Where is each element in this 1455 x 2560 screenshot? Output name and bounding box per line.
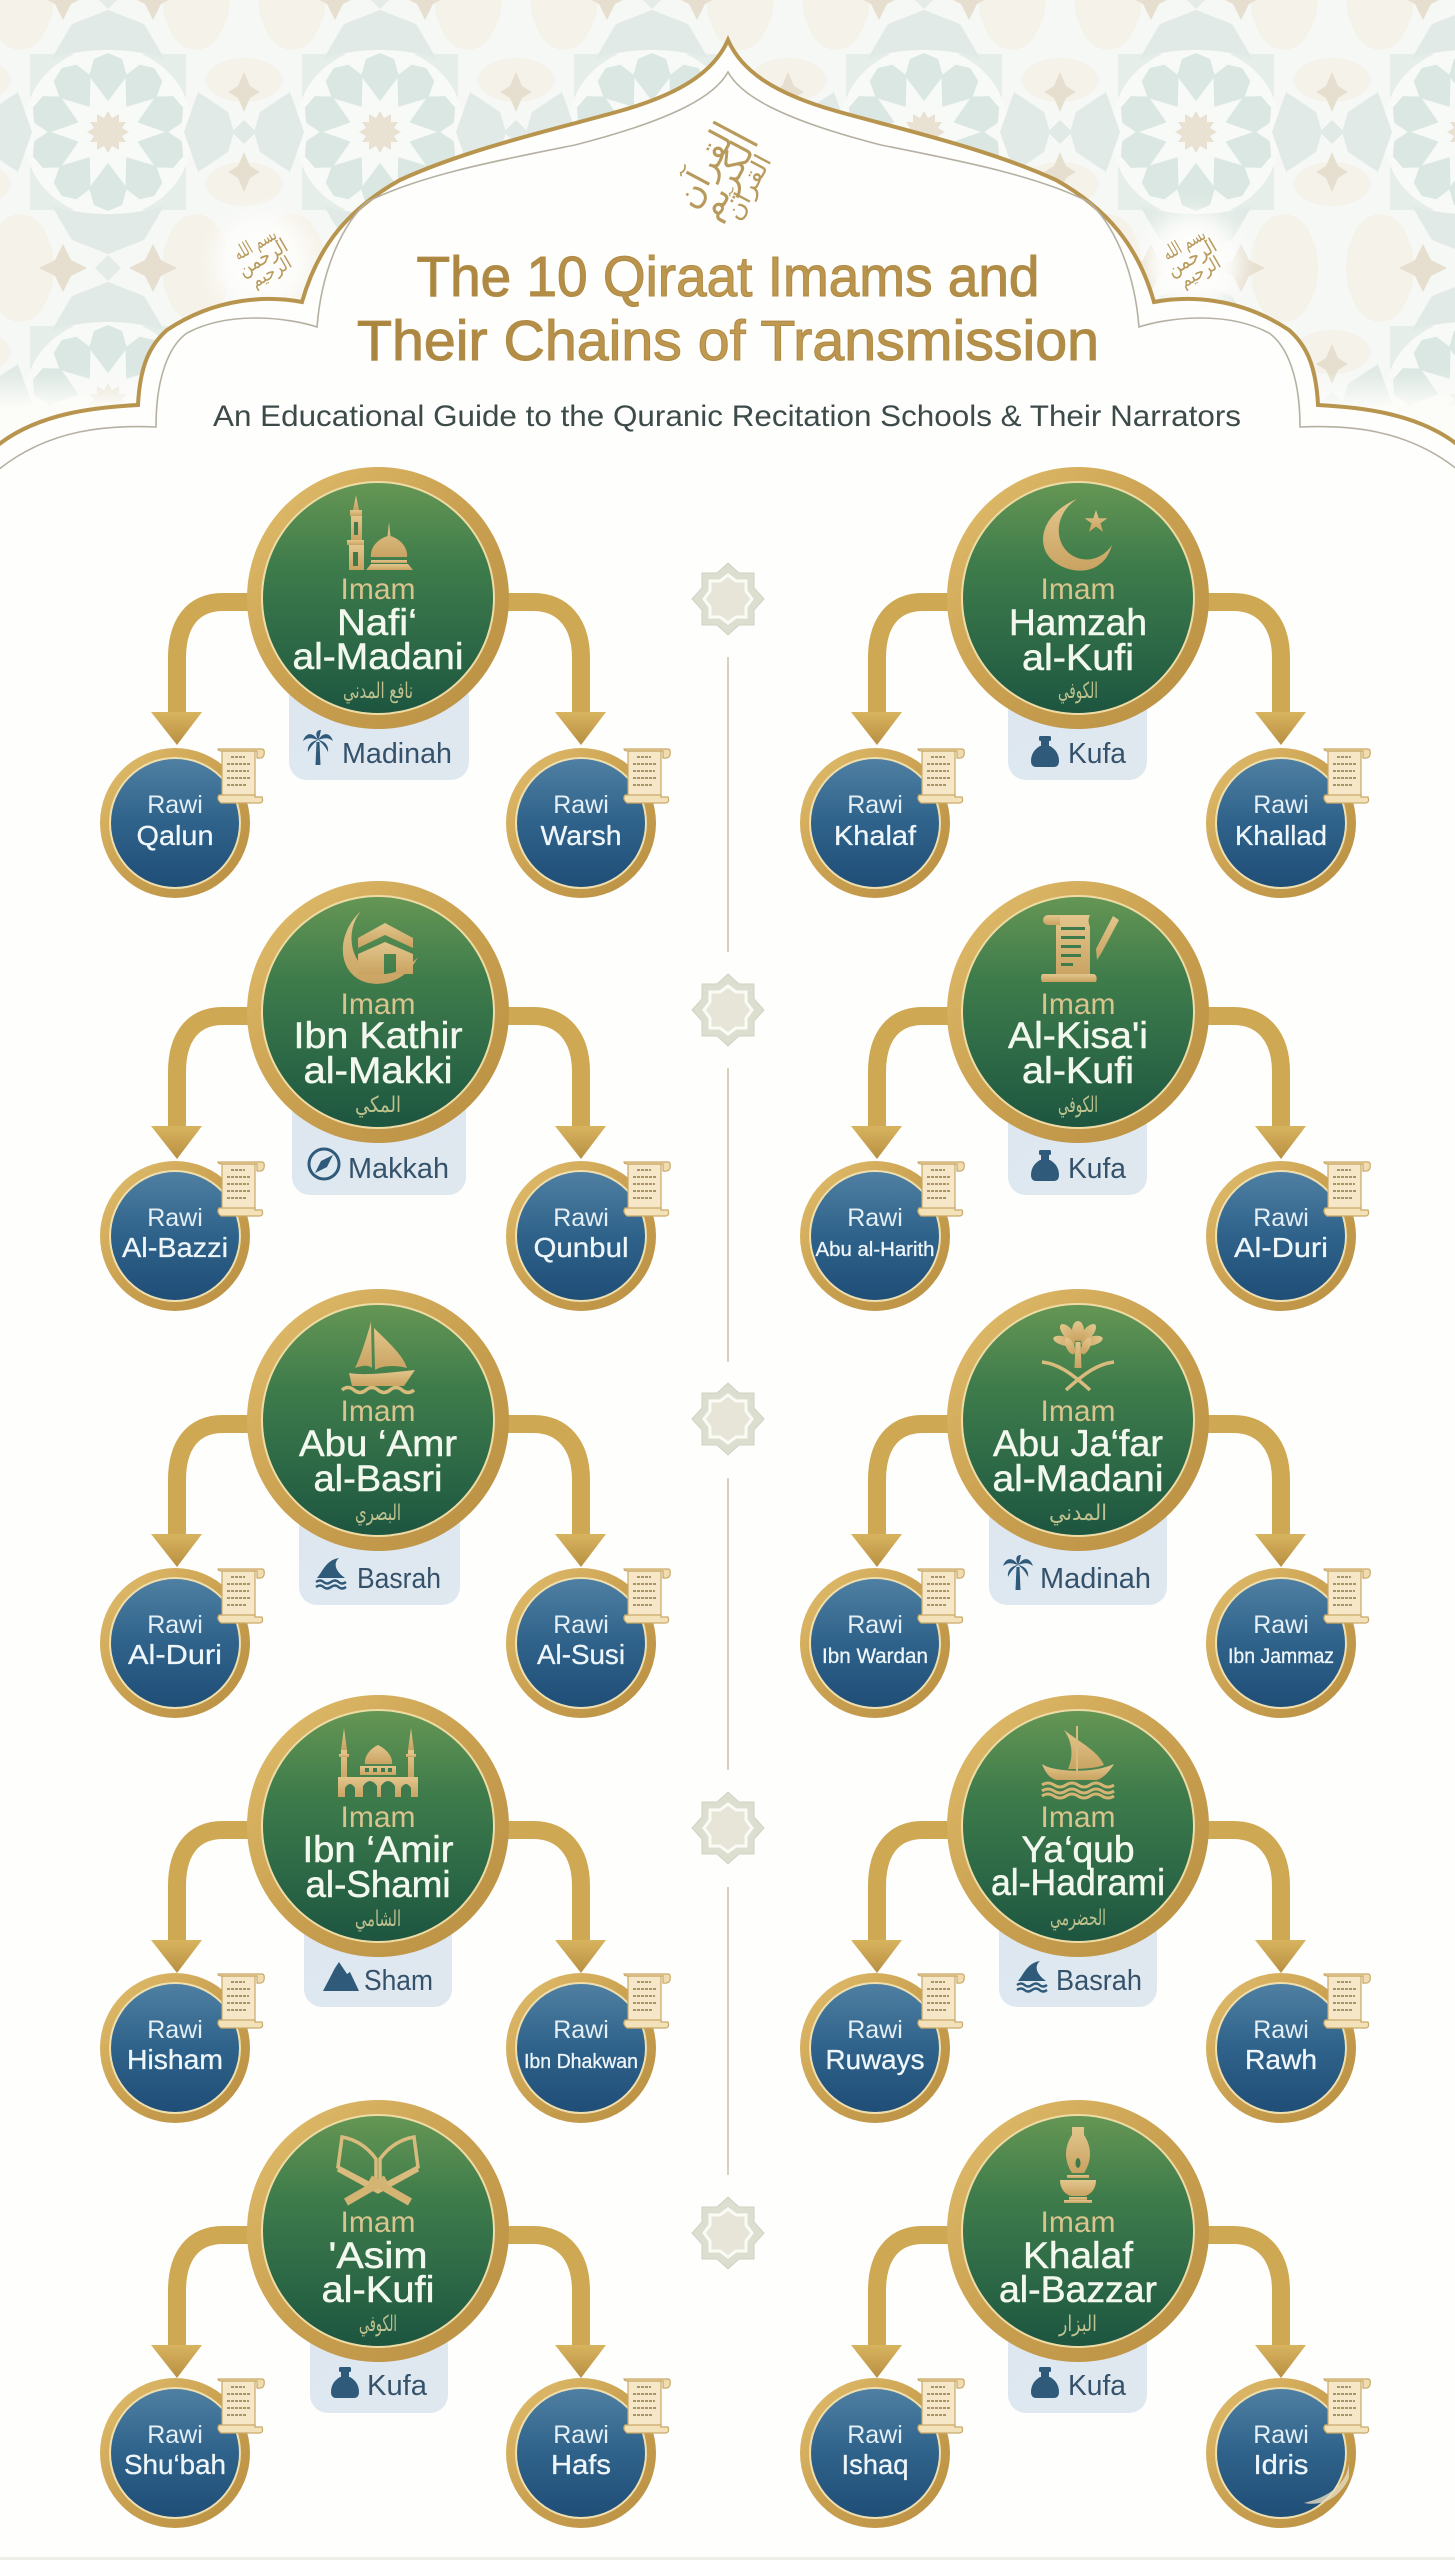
panel: Imam Hamzah al-Kufi (800, 467, 1370, 898)
narrator: Al-Duri (100, 1568, 264, 1718)
calligraphy roundel right: بسم الله (1159, 223, 1209, 265)
location badge: Madinah (989, 1500, 1167, 1605)
narrator: Al-Bazzi: Al-Bazzi (122, 1232, 228, 1263)
arrows to narrators (851, 1830, 1306, 1973)
narrator: Al-Susi: Al-Susi (537, 1639, 625, 1670)
narrator: Al-Bazzi (100, 1161, 264, 1311)
calligraphy roundel left (226, 221, 300, 295)
calligraphy roundel right: الرحيم (1176, 252, 1225, 292)
imam medallion (947, 1289, 1209, 1551)
narrator: Al-Duri: Rawi (147, 1611, 203, 1639)
narrator: Warsh (506, 748, 670, 898)
imam medallion (247, 467, 509, 729)
imam medallion: نافع المدني (343, 679, 413, 704)
narrator: Hafs: Hafs (551, 2449, 611, 2480)
calligraphy roundel left: الرحيم (247, 252, 296, 292)
imam medallion: Ya‘qub (1022, 1829, 1134, 1870)
narrator: Rawh: Rawh (1245, 2044, 1317, 2075)
imam medallion: Imam (1040, 1801, 1116, 1834)
location badge: Makkah (292, 1092, 466, 1195)
narrator: Ishaq: Ishaq (842, 2449, 908, 2480)
divider star 2 (692, 974, 764, 1046)
arrows to narrators (851, 2235, 1306, 2378)
narrator: Abu al-Harith: Rawi (847, 1204, 903, 1232)
divider star 3 (692, 1383, 764, 1455)
narrator: Ibn Wardan: Rawi (847, 1611, 903, 1639)
imam medallion (947, 2100, 1209, 2362)
icon: Kaaba and crescent (343, 911, 418, 984)
location badge: Kufa (1008, 678, 1147, 780)
narrator: Khalaf: Rawi (847, 791, 903, 819)
imam medallion: Ibn Kathir (294, 1015, 462, 1056)
imam medallion: Imam (340, 1801, 416, 1834)
narrator: Ibn Dhakwan: Ibn Dhakwan (524, 2051, 638, 2073)
imam medallion: Nafi‘ (337, 602, 417, 643)
narrator: Ishaq: Rawi (847, 2421, 903, 2449)
imam medallion: الكوفي (359, 2312, 397, 2337)
imam medallion: الكوفي (1058, 1093, 1098, 1118)
imam medallion: Al-Kisa'i (1008, 1015, 1148, 1056)
panel: Imam Ibn Kathir al-Makki (100, 881, 670, 1311)
panel: Imam Abu Ja'far al-Madani (800, 1289, 1370, 1718)
location badge: Madinah: Madinah (1040, 1563, 1151, 1595)
title (357, 245, 1099, 373)
imam medallion: al-Madani (292, 636, 464, 677)
location badge: Sham: Sham (364, 1965, 433, 1997)
narrator: Idris: Rawi (1253, 2421, 1309, 2449)
narrator: Ishaq (800, 2378, 964, 2528)
imam medallion: Imam (340, 573, 416, 606)
title: The 10 Qiraat Imams and (416, 245, 1040, 309)
arrows to narrators (851, 1016, 1306, 1159)
panel: Imam Ibn 'Amir al-Shami (100, 1695, 670, 2123)
narrator: Ibn Jammaz (1206, 1568, 1370, 1718)
narrator: Ibn Jammaz: Rawi (1253, 1611, 1309, 1639)
narrator: Hisham: Rawi (147, 2016, 203, 2044)
calligraphy: Al-Quran al-Karim: القرآن (719, 149, 777, 225)
pattern fade right corner (1311, 372, 1455, 452)
imam medallion: المدني (1049, 1501, 1107, 1526)
narrator: Shu'bah: Rawi (147, 2421, 203, 2449)
location badge: Kufa (310, 2311, 448, 2413)
imam medallion: الكوفي (1058, 679, 1098, 704)
calligraphy roundel right: الرحمن (1162, 233, 1221, 281)
location badge: Kufa (1008, 1092, 1147, 1195)
arrows to narrators (151, 1830, 606, 1973)
icon: mosque (347, 495, 413, 570)
bottom strip (0, 2557, 1455, 2560)
imam medallion: Imam (1040, 573, 1116, 606)
location badge: Kufa (1008, 2311, 1147, 2413)
narrator: Abu al-Harith (800, 1161, 964, 1311)
arrows to narrators (851, 1424, 1306, 1567)
imam medallion: Imam (1040, 1395, 1116, 1428)
imam medallion: al-Kufi (1022, 637, 1134, 678)
narrator: Ibn Wardan (800, 1568, 964, 1718)
narrator: Khallad: Rawi (1253, 791, 1309, 819)
location badge: Basrah (299, 1500, 460, 1605)
imam medallion: الشامي (355, 1907, 401, 1932)
subtitle: An Educational Guide to the Quranic Recitation Schools & Their Narrators (213, 400, 1241, 433)
narrator: Qunbul: Rawi (553, 1204, 609, 1232)
icon: dhow (1042, 1726, 1114, 1798)
location badge: Kufa: Kufa (1068, 738, 1127, 770)
narrator: Al-Susi: Rawi (553, 1611, 609, 1639)
calligraphy roundel left: بسم الله (230, 223, 280, 265)
narrator: Hafs: Rawi (553, 2421, 609, 2449)
imam medallion (247, 881, 509, 1143)
narrator: Ibn Dhakwan (506, 1973, 670, 2123)
narrator: Qalun: Qalun (136, 820, 214, 851)
narrator: Abu al-Harith: Abu al-Harith (816, 1239, 934, 1261)
panel: Imam 'Asim al-Kufi (100, 2100, 670, 2528)
narrator: Shu'bah: Shu‘bah (124, 2449, 226, 2480)
imam medallion: الحضرمي (1050, 1906, 1106, 1931)
imam medallion: Khalaf (1023, 2235, 1134, 2276)
arrows to narrators (151, 2235, 606, 2378)
narrator: Warsh: Rawi (553, 791, 609, 819)
narrator: Ibn Wardan: Ibn Wardan (822, 1645, 928, 1668)
location badge: Basrah: Basrah (1056, 1965, 1142, 1997)
narrator: Qalun: Rawi (147, 791, 203, 819)
location badge: Basrah: Basrah (357, 1563, 441, 1595)
imam medallion: المكي (355, 1093, 401, 1118)
narrator: Al-Duri: Al-Duri (1234, 1232, 1328, 1263)
imam medallion: al-Basri (314, 1458, 442, 1499)
imam medallion: al-Makki (304, 1050, 452, 1091)
icon: sailboat (342, 1322, 415, 1392)
geometric pattern band (0, 0, 1455, 480)
narrator: Khallad (1206, 748, 1370, 898)
location badge: Madinah (289, 678, 469, 780)
calligraphy roundel left: الرحمن (233, 233, 292, 281)
imam medallion: Imam (1040, 988, 1116, 1021)
calligraphy: Al-Quran al-Karim: القرآن (667, 115, 746, 215)
narrator: Hafs (506, 2378, 670, 2528)
narrator: Ibn Jammaz: Ibn Jammaz (1228, 1645, 1334, 1668)
location badge: Kufa: Kufa (1068, 2370, 1127, 2402)
narrator: Al-Duri: Rawi (1253, 1204, 1309, 1232)
imam medallion (247, 1695, 509, 1957)
title: Their Chains of Transmission (357, 309, 1099, 373)
imam medallion (247, 1289, 509, 1551)
calligraphy roundel right (1155, 221, 1229, 295)
imam medallion: Imam (340, 988, 416, 1021)
imam medallion: 'Asim (328, 2235, 428, 2276)
narrator: Rawh: Rawi (1253, 2016, 1309, 2044)
imam medallion: Imam (340, 1395, 416, 1428)
narrator: Idris (1206, 2378, 1370, 2528)
narrator: Al-Duri (1206, 1161, 1370, 1311)
panel: Imam Abu 'Amr al-Basri (100, 1289, 670, 1718)
location badge: Madinah: Madinah (342, 738, 452, 770)
narrator: Hisham (100, 1973, 264, 2123)
imam medallion: Hamzah (1009, 602, 1147, 643)
arrows to narrators (851, 602, 1306, 745)
narrator: Khalaf (800, 748, 964, 898)
narrator: Al-Duri: Al-Duri (128, 1639, 222, 1670)
pattern fade left corner (0, 372, 145, 452)
icon: crescent and star (1043, 499, 1112, 571)
center divider line (727, 657, 729, 2175)
narrator: Al-Bazzi: Rawi (147, 1204, 203, 1232)
imam medallion: al-Madani (992, 1458, 1164, 1499)
panel: Imam Ya'qub al-Hadrami (800, 1695, 1370, 2123)
narrator: Ruways: Rawi (847, 2016, 903, 2044)
calligraphy: Al-Quran al-Karim (667, 115, 782, 235)
imam medallion: al-Bazzar (999, 2269, 1157, 2310)
imam medallion: al-Kufi (322, 2269, 434, 2310)
icon: palm and crossed swords (1042, 1321, 1114, 1390)
narrator: Ruways (800, 1973, 964, 2123)
imam medallion: Imam (1040, 2206, 1116, 2239)
arrows to narrators (151, 602, 606, 745)
arrows to narrators (151, 1424, 606, 1567)
imam medallion: al-Hadrami (991, 1862, 1165, 1903)
imam medallion (947, 467, 1209, 729)
divider star 4 (692, 1792, 764, 1864)
imam medallion: Abu Ja‘far (993, 1423, 1163, 1464)
location badge: Kufa: Kufa (367, 2370, 428, 2402)
narrator: Shu'bah (100, 2378, 264, 2528)
narrator: Qunbul (506, 1161, 670, 1311)
icon: grand mosque (338, 1728, 418, 1797)
icon: scroll and pen (1041, 915, 1119, 982)
location badge: Sham (304, 1906, 452, 2007)
narrator: Al-Susi (506, 1568, 670, 1718)
narrator: Khallad: Khallad (1235, 820, 1327, 851)
calligraphy: Al-Quran al-Karim: الكريم (689, 127, 767, 227)
panel: Imam Nafi' al-Madani (100, 467, 670, 898)
icon: Quran on stand (338, 2137, 418, 2202)
imam medallion: Imam (340, 2206, 416, 2239)
divider star 1 (692, 563, 764, 635)
narrator: Rawh (1206, 1973, 1370, 2123)
imam medallion: Abu ‘Amr (299, 1423, 457, 1464)
narrator: Idris: Idris (1254, 2449, 1308, 2480)
narrator: Warsh: Warsh (540, 820, 622, 851)
location badge: Basrah (999, 1906, 1157, 2007)
imam medallion (947, 881, 1209, 1143)
imam medallion (247, 2100, 509, 2362)
divider star 5 (692, 2197, 764, 2269)
arrows to narrators (151, 1016, 606, 1159)
icon: oil lamp (1060, 2127, 1096, 2203)
narrator: Ruways: Ruways (826, 2044, 924, 2075)
imam medallion: al-Kufi (1022, 1050, 1134, 1091)
location badge: Makkah: Makkah (348, 1153, 449, 1185)
panel: Imam Al-Kisa'i al-Kufi (800, 881, 1370, 1311)
narrator: Ibn Dhakwan: Rawi (553, 2016, 609, 2044)
imam medallion (947, 1695, 1209, 1957)
imam medallion: البصري (355, 1501, 401, 1526)
narrator: Khalaf: Khalaf (834, 820, 916, 851)
narrator: Qunbul: Qunbul (534, 1232, 628, 1263)
location badge: Kufa: Kufa (1068, 1153, 1127, 1185)
narrator: Qalun (100, 748, 264, 898)
imam medallion: البزار (1058, 2312, 1097, 2337)
panel: Imam Khalaf al-Bazzar (800, 2100, 1370, 2528)
imam medallion: al-Shami (306, 1864, 450, 1905)
narrator: Hisham: Hisham (127, 2044, 223, 2075)
imam medallion: Ibn ‘Amir (302, 1829, 454, 1870)
